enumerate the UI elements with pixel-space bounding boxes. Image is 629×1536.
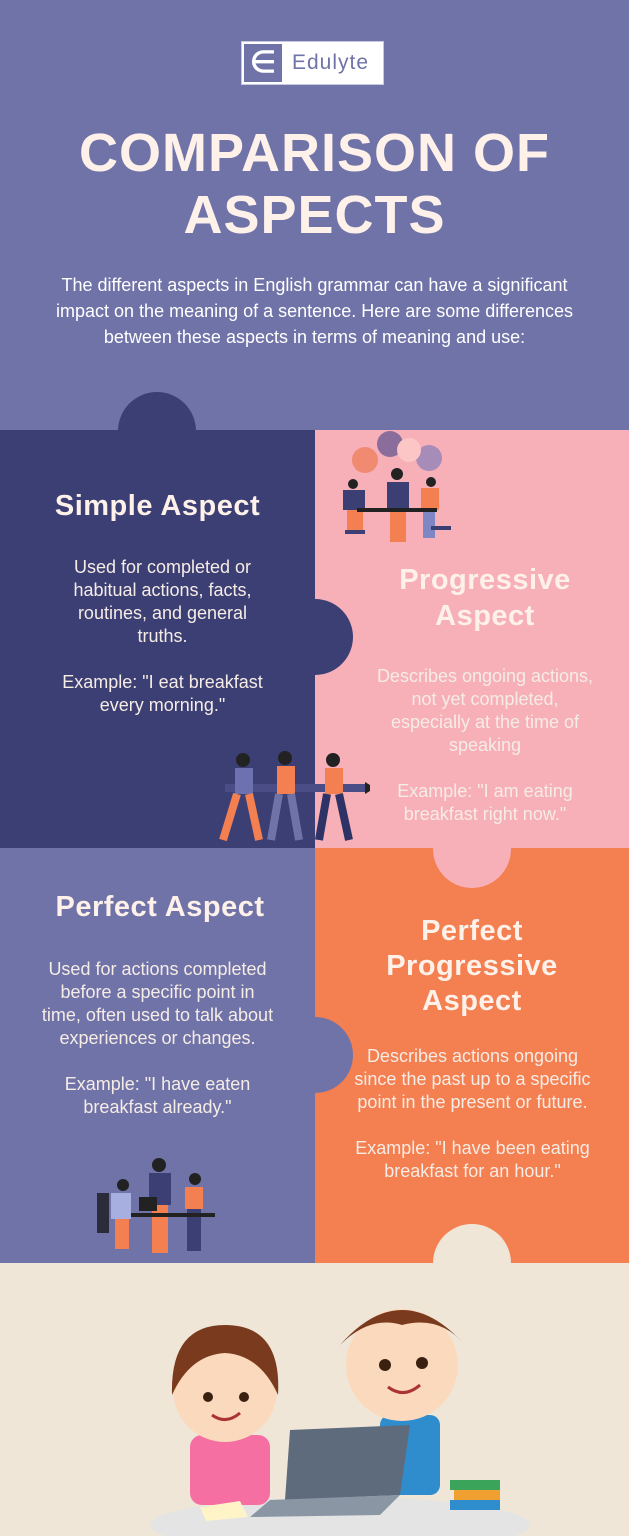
logo [242,42,383,84]
panel: periwinkle (perfect) [0,848,315,1263]
heading: perfect progressive aspect [386,915,558,1017]
knob: navy top [118,392,196,470]
text: simple: Used for completed or habitual actions, facts, routines, and general truths. [73,557,252,646]
panel: navy (simple) [0,430,315,848]
text: progressive: Example: "I am eating breakfast right now." [397,781,573,824]
text: simple [62,557,263,715]
intro text: The different aspects in English grammar can have a significant impact on the meaning of a sentence. Here are some differences between these aspects in terms of meaning and use: [56,275,573,347]
heading: progressive aspect: Progressive [399,564,571,596]
logo mark [244,44,282,82]
text: simple: Example: "I eat breakfast every morning." [62,672,263,715]
illustration: kids with laptop [150,1309,530,1536]
knob: navy into pink [277,599,353,675]
heading: perfect progressive aspect: Aspect [422,985,522,1017]
text: perfect progressive: Describes actions ongoing since the past up to a specific point in the present or future. [354,1046,591,1112]
heading: progressive aspect [399,564,571,632]
illustration: team pulling pencil [219,751,370,842]
knob: periwinkle into orange [277,1017,353,1093]
text: perfect progressive [354,1046,591,1181]
illustration: office desk [97,1158,215,1253]
text: perfect progressive: Example: "I have been eating breakfast for an hour." [355,1138,590,1181]
heading: perfect progressive aspect: Progressive [386,950,558,982]
title [79,123,550,245]
panel: orange (perfect progressive) [315,848,629,1263]
heading: perfect progressive aspect: Perfect [421,915,523,947]
knob: pink into orange [433,810,511,888]
heading: progressive aspect: Aspect [435,600,535,632]
panel: beige bottom [0,1263,629,1536]
knob: beige into orange [433,1224,511,1302]
panel: pink (progressive) [315,430,629,848]
heading: simple aspect: Simple Aspect [55,490,260,522]
heading: perfect aspect: Perfect Aspect [55,891,264,923]
text: progressive [377,666,593,824]
illustration: team meeting with speech bubbles [343,431,451,542]
logo mark: ∈ [250,46,276,79]
text: perfect: Example: "I have eaten breakfast already." [65,1074,250,1117]
logo text: Edulyte [292,51,369,74]
title: COMPARISON OF [79,123,550,183]
text: perfect: Used for actions completed before a specific point in time, often used to talk about experiences or changes. [42,959,273,1048]
text: progressive: Describes ongoing actions, not yet completed, especially at the time of speaking [377,666,593,755]
text: perfect [42,959,273,1117]
title: ASPECTS [183,185,446,245]
